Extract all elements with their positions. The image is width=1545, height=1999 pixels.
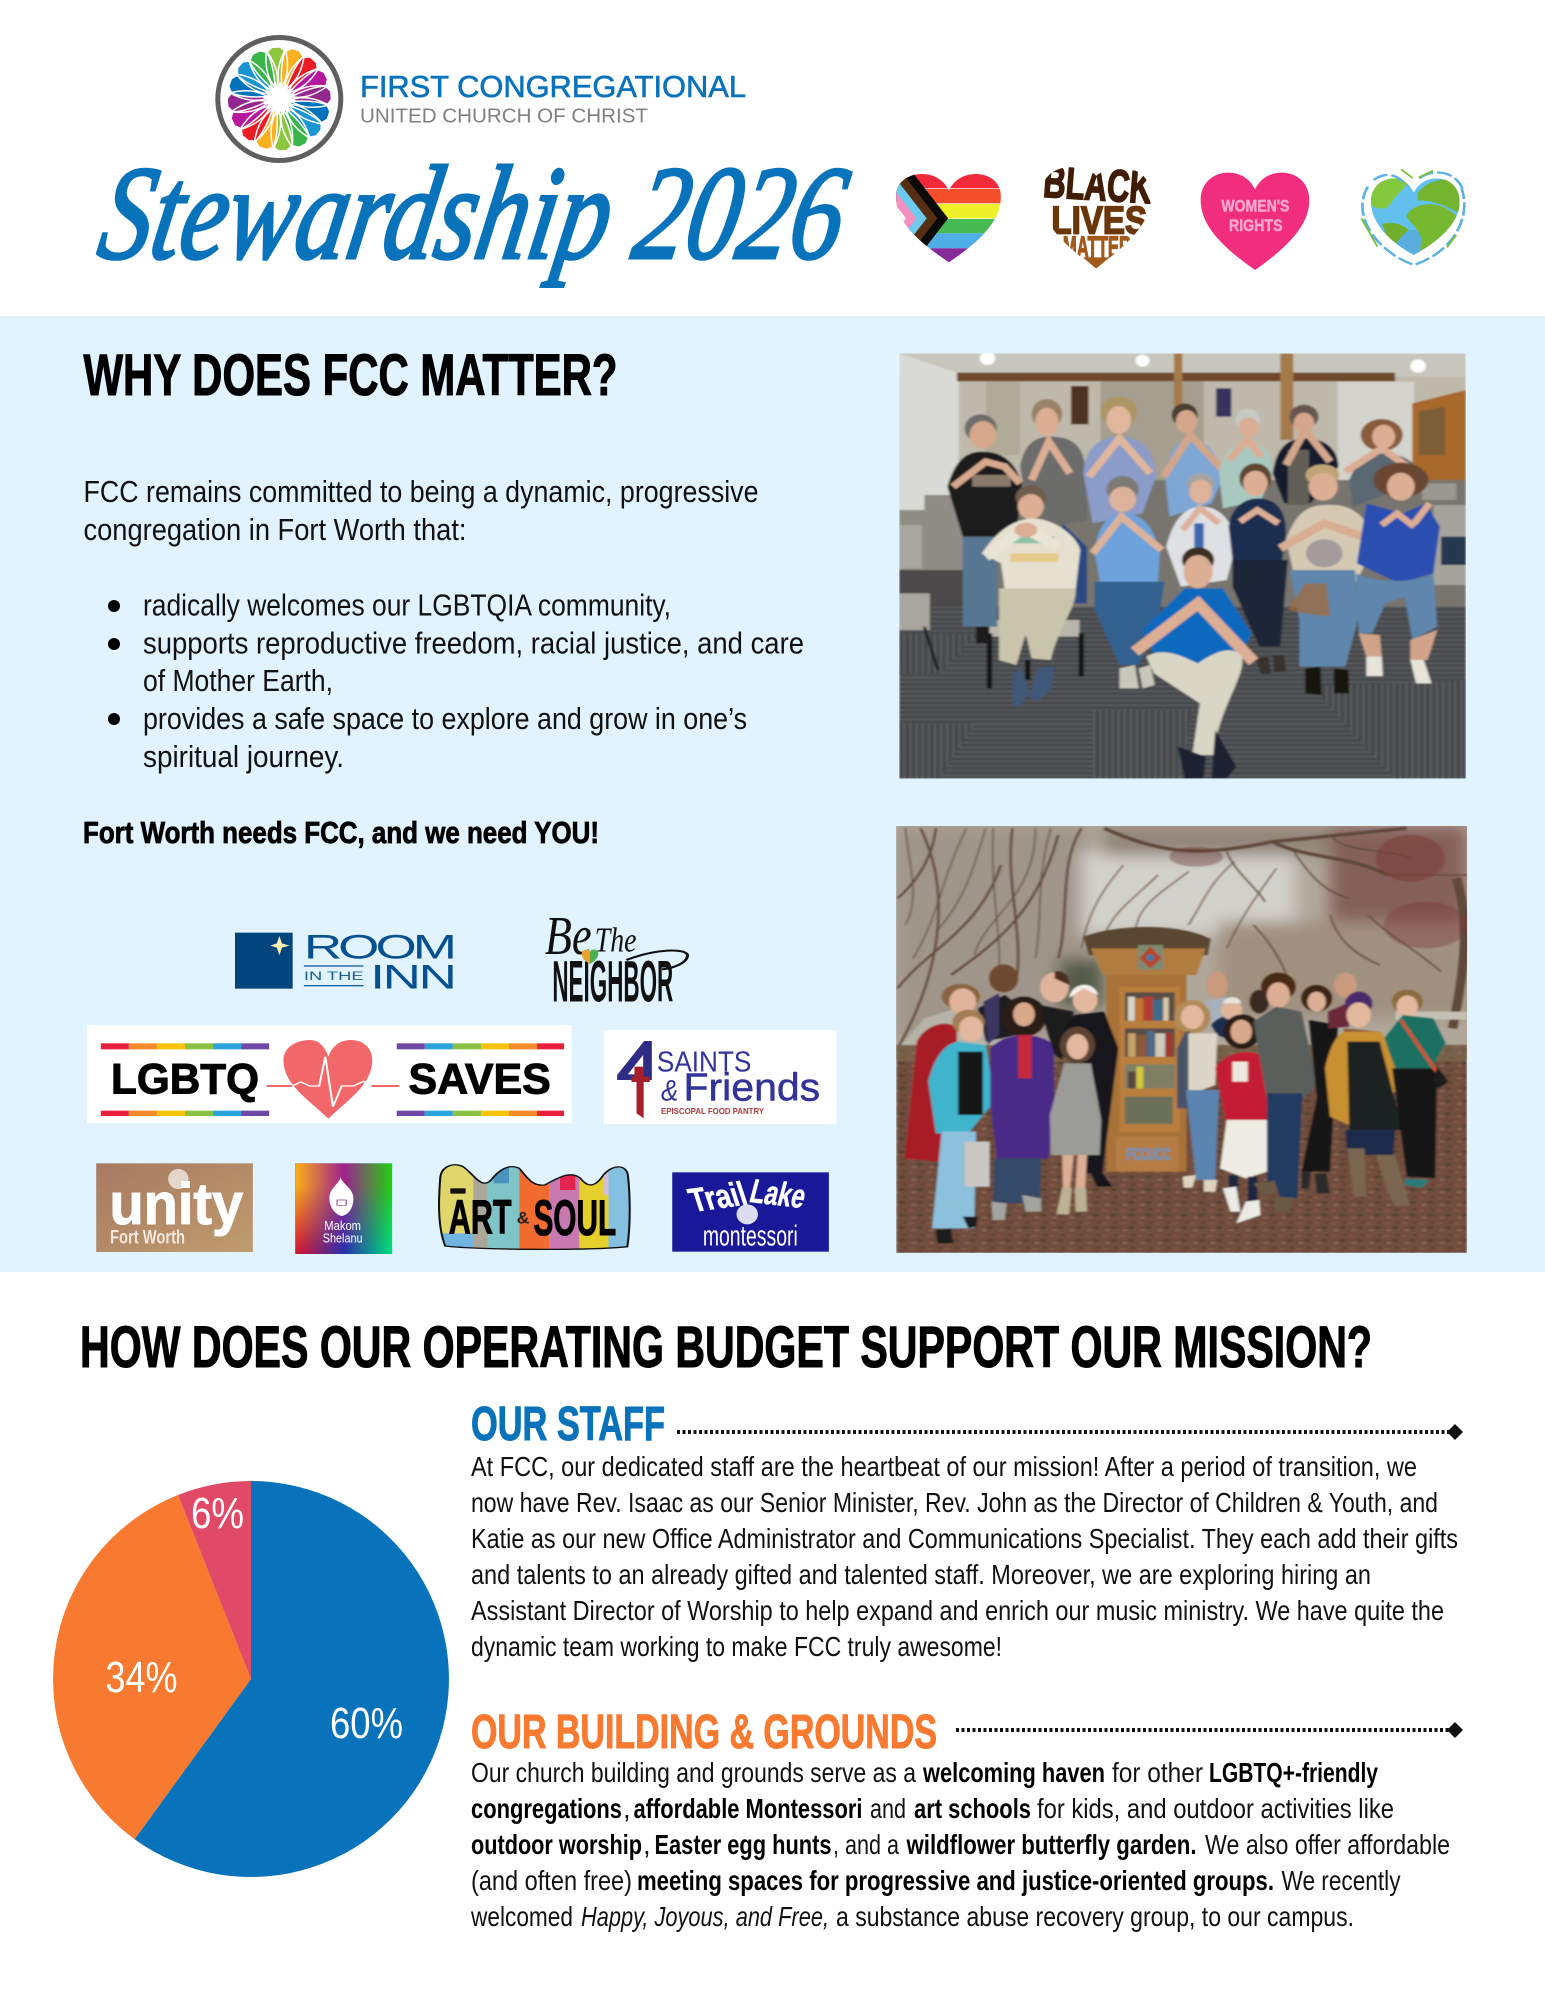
callout: we need you: Fort Worth needs FCC, and we need YOU! xyxy=(83,815,599,850)
building body text: for kids, and outdoor activities like xyxy=(1037,1793,1394,1824)
building body text: welcomed xyxy=(470,1901,573,1932)
bullet list: spiritual journey. xyxy=(143,739,344,774)
staff body text: dynamic team working to make FCC truly awesome! xyxy=(471,1631,1002,1662)
pie chart xyxy=(53,1481,449,1877)
logo: Be the Neighbor: Be xyxy=(545,906,592,966)
pie slice: 60 percent staff xyxy=(135,1481,449,1877)
intro text: FCC remains committed to being a dynamic, progressive xyxy=(84,474,758,509)
pie slice: 6 percent xyxy=(178,1481,251,1679)
panel: why FCC matters xyxy=(83,343,804,850)
logo: Art and Soul: & xyxy=(517,1209,529,1227)
bullet list xyxy=(108,588,804,774)
building body text: and xyxy=(870,1793,906,1824)
building body text: art schools xyxy=(914,1793,1031,1824)
logo: Art and Soul: ART xyxy=(449,1190,512,1244)
building body text: wildflower butterfly garden. xyxy=(906,1829,1196,1860)
icon: women's rights heart xyxy=(1201,173,1309,270)
logo: Makom Shelanu: Shelanu xyxy=(323,1230,363,1245)
building body text: , xyxy=(643,1829,651,1860)
dotted connector xyxy=(956,1722,1463,1738)
heading: our building and grounds: OUR BUILDING & GROUNDS xyxy=(471,1706,937,1759)
building body text: , and a xyxy=(833,1829,900,1860)
logo: Makom Shelanu: Makom xyxy=(324,1218,361,1233)
logo: 4 Saints and Friends xyxy=(604,1030,837,1124)
bullet list: radically welcomes our LGBTQIA community, xyxy=(143,588,671,622)
values hearts row xyxy=(896,167,1466,270)
logo: LGBTQ Saves: LGBTQ xyxy=(111,1055,259,1103)
building body text: We also offer affordable xyxy=(1205,1829,1450,1860)
bullet list: of Mother Earth, xyxy=(143,663,333,698)
building body text: affordable Montessori xyxy=(634,1793,862,1824)
icon: pride heart xyxy=(896,174,1001,262)
building body text: meeting spaces for progressive and justice-oriented groups. xyxy=(637,1865,1274,1896)
heading: why does FCC matter: WHY DOES FCC MATTER? xyxy=(84,343,618,408)
icon: Black Lives Matter heart: LIVES xyxy=(1051,198,1147,242)
intro text: congregation in Fort Worth that: xyxy=(84,512,466,547)
icon: Black Lives Matter heart: MATTER xyxy=(1063,229,1131,264)
logo: 4 Saints and Friends: EPISCOPAL FOOD PANTRY xyxy=(661,1108,764,1116)
logo: Unity Fort Worth xyxy=(96,1163,253,1252)
photo: youth group at little free library: FCCUCC xyxy=(1126,1144,1170,1164)
building body text: (and often free) xyxy=(471,1865,632,1896)
partner logos: SOUL xyxy=(533,1189,616,1246)
building body text: Easter egg hunts xyxy=(654,1829,832,1860)
section: our staff xyxy=(471,1398,1463,1662)
pie slice: 34 percent building xyxy=(53,1495,251,1839)
building body text: , xyxy=(623,1793,631,1824)
heading: our staff: OUR STAFF xyxy=(471,1398,665,1451)
logo name: FIRST CONGREGATIONAL xyxy=(360,69,746,104)
logo: Unity Fort Worth: unity xyxy=(109,1171,243,1236)
logo: Trail Lake Montessori xyxy=(672,1172,829,1252)
bullet list: supports reproductive freedom, racial justice, and care xyxy=(143,626,804,660)
logo: Trail Lake Montessori: Trail xyxy=(684,1175,752,1220)
background band: why FCC matters xyxy=(0,316,1545,1272)
logo: 4 Saints and Friends: & xyxy=(661,1074,678,1108)
pie label: 6%: 6% xyxy=(191,1489,244,1538)
logo: Makom Shelanu xyxy=(295,1163,392,1254)
logo: LGBTQ Saves: SAVES xyxy=(408,1055,551,1103)
partner logos xyxy=(87,906,836,1254)
building body text: Happy, Joyous, and Free, xyxy=(581,1901,829,1932)
icon: Black Lives Matter heart xyxy=(1044,167,1151,268)
building body text: Our church building and grounds serve as a xyxy=(471,1757,917,1788)
icon: women's rights heart: RIGHTS xyxy=(1229,216,1283,235)
section: our building and grounds xyxy=(470,1706,1463,1932)
logo: Room in the Inn: ROOM xyxy=(304,927,457,966)
logo: Room in the Inn xyxy=(235,927,457,996)
bullet list: provides a safe space to explore and grow in one’s xyxy=(143,701,747,736)
title: Stewardship 2026 xyxy=(90,140,858,288)
photo: youth group at little free library xyxy=(896,826,1468,1253)
staff body text: At FCC, our dedicated staff are the heartbeat of our mission! After a period of transition, we xyxy=(471,1451,1417,1482)
intro text xyxy=(84,474,758,547)
building body text: a substance abuse recovery group, to our campus. xyxy=(836,1901,1354,1932)
building body text: congregations xyxy=(471,1793,622,1824)
logo subtitle: UNITED CHURCH OF CHRIST xyxy=(360,106,648,128)
logo: Art and Soul xyxy=(438,1162,631,1252)
building body text: LGBTQ+-friendly xyxy=(1209,1757,1379,1788)
logo: 4 Saints and Friends: SAINTS xyxy=(657,1046,751,1078)
logo: Room in the Inn: INN xyxy=(370,957,457,996)
building body text: outdoor worship xyxy=(471,1829,642,1860)
logo: Unity Fort Worth: Fort Worth xyxy=(110,1226,185,1248)
building body text xyxy=(470,1757,1450,1932)
staff body text: and talents to an already gifted and talented staff. Moreover, we are exploring hiring an xyxy=(471,1559,1371,1590)
icon: earth heart xyxy=(1361,169,1464,265)
pie label: 34%: 34% xyxy=(106,1653,178,1702)
icon: women's rights heart: WOMEN'S xyxy=(1221,197,1289,215)
building body text: welcoming haven xyxy=(922,1757,1105,1788)
icon: Black Lives Matter heart: BLACK xyxy=(1042,157,1154,214)
logo: Be the Neighbor xyxy=(545,906,688,1014)
logo: Room in the Inn: IN THE xyxy=(304,970,364,983)
pie label: 60%: 60% xyxy=(330,1699,403,1748)
logo: Be the Neighbor: The xyxy=(595,921,637,959)
icon: rainbow rosette xyxy=(218,38,341,160)
building body text: for other xyxy=(1112,1757,1203,1788)
staff body text xyxy=(471,1451,1458,1662)
logo: First Congregational xyxy=(218,38,746,160)
photo: congregation making heart hands xyxy=(899,353,1466,779)
logo: LGBTQ Saves xyxy=(87,1025,572,1123)
dotted connector xyxy=(677,1424,1463,1440)
building body text: We recently xyxy=(1282,1865,1401,1896)
